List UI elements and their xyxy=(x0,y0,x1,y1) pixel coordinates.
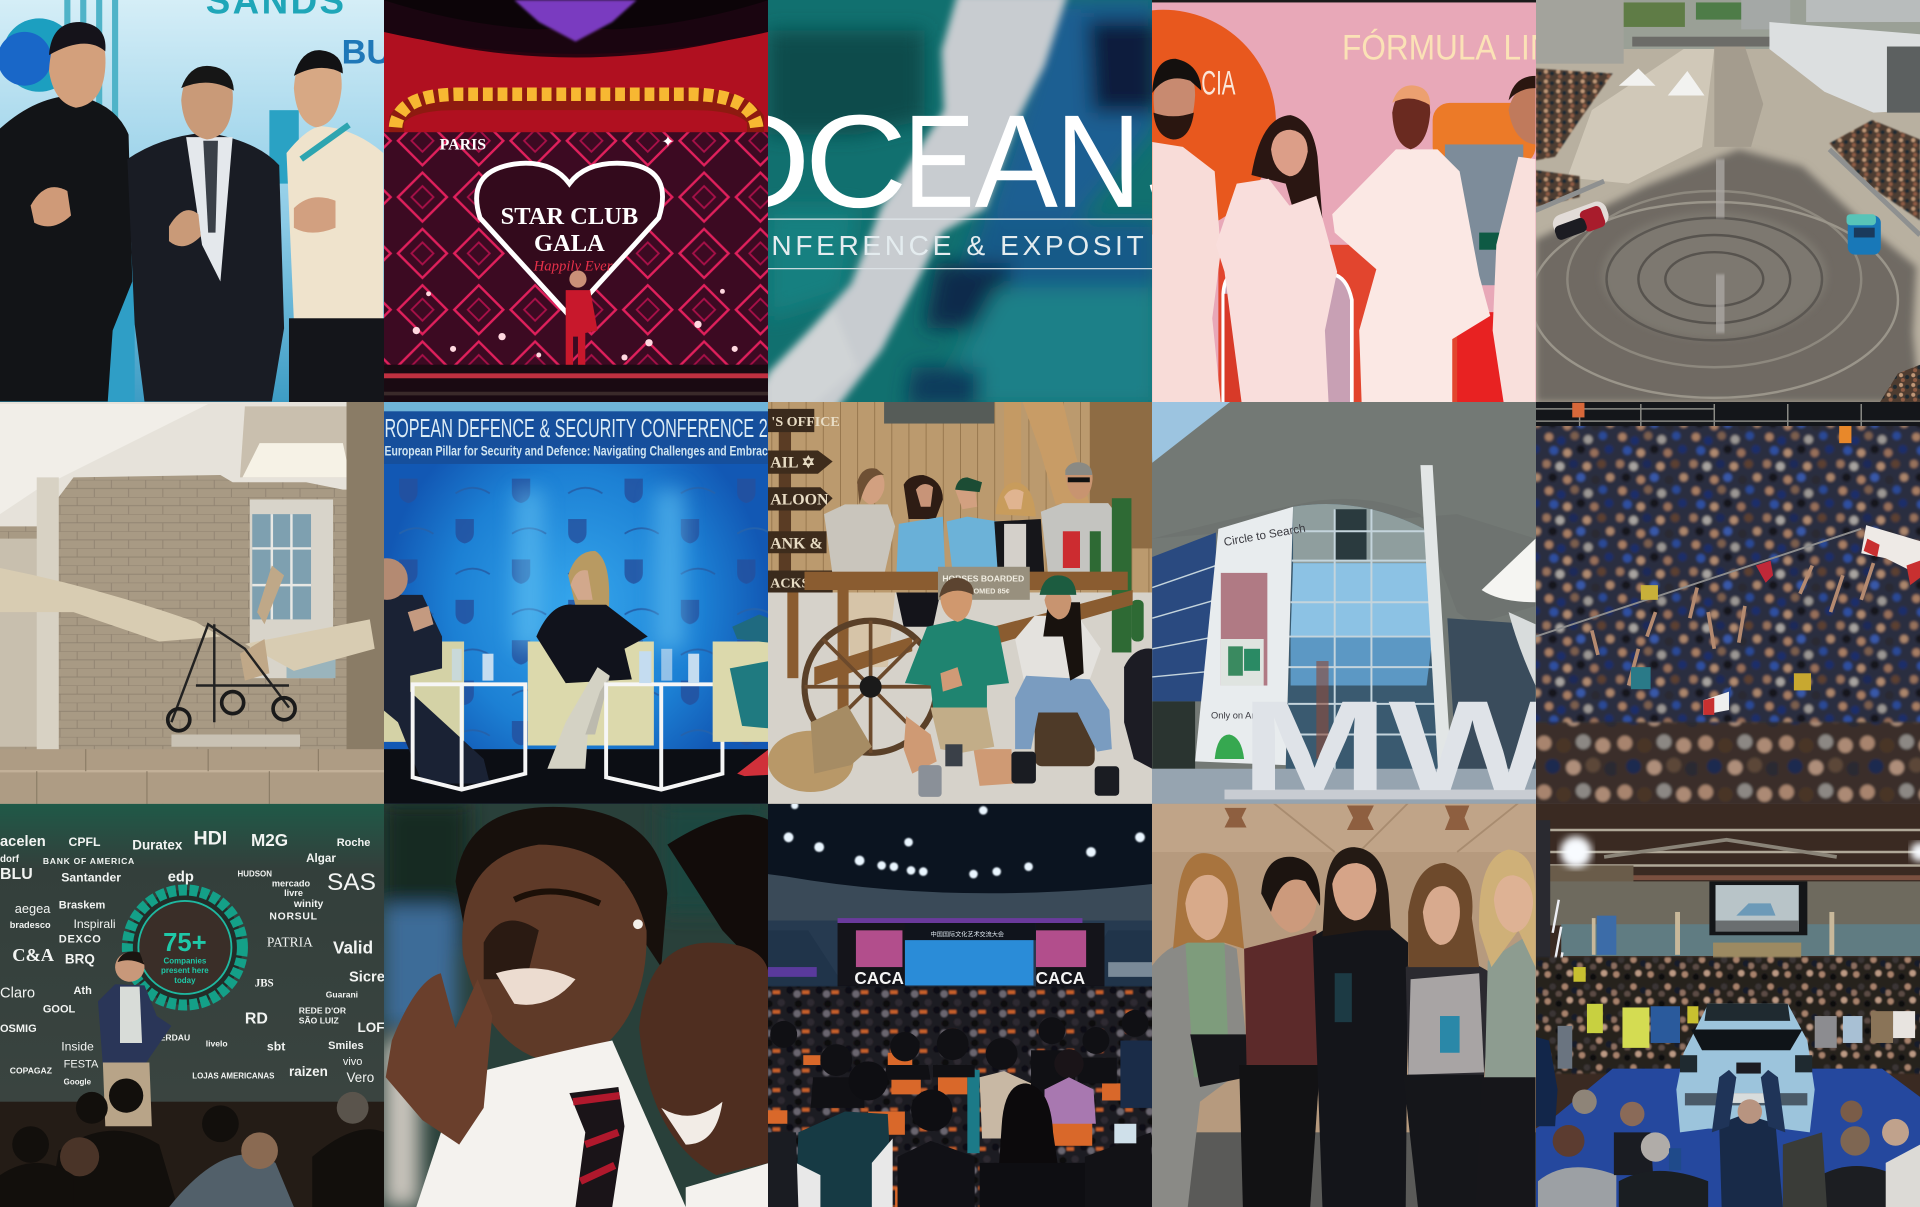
photo: western themed team at wooden barn xyxy=(768,402,1153,804)
side table right xyxy=(606,684,722,790)
wall of company logos: NORSUL xyxy=(269,911,318,922)
left girl white shirt xyxy=(416,1041,686,1207)
wall of company logos: M2G xyxy=(251,830,288,850)
blue suv xyxy=(1676,1004,1815,1132)
photo: museum replica aircraft xyxy=(0,402,384,804)
wall of company logos: Smiles xyxy=(328,1040,364,1052)
photo: laughing students in school uniform xyxy=(383,803,769,1207)
photo: star club gala stage: ✦ xyxy=(661,134,675,151)
woman with patterned top xyxy=(1403,863,1491,1207)
wall of company logos: Claro xyxy=(0,986,35,1002)
photo: drift car street circuit xyxy=(1531,0,1920,403)
stage floor xyxy=(383,749,769,804)
wall of company logos: Inside xyxy=(61,1039,94,1053)
horses boarded sign xyxy=(938,567,1030,600)
wall of company logos: BLU xyxy=(0,866,33,883)
raised arms highlights xyxy=(1592,563,1873,686)
barrier xyxy=(1536,149,1920,235)
woman in blue tee with curly hair xyxy=(896,475,945,627)
right girl xyxy=(639,815,769,1207)
75+ green ring: today xyxy=(174,976,196,985)
red lantern xyxy=(1063,531,1080,568)
wall of company logos: dorf xyxy=(0,854,20,865)
wall of company logos: OSMIG xyxy=(0,1023,37,1035)
woman in black with pale boots xyxy=(536,551,648,769)
crouching woman in white with cap xyxy=(1011,575,1119,796)
photo: formula line promoters in white: CIA xyxy=(1201,64,1236,102)
audience background xyxy=(0,1102,384,1207)
OCEANS title xyxy=(700,88,1216,236)
wall of company logos: GOOL xyxy=(43,1003,76,1015)
gala title xyxy=(501,203,638,275)
wall of company logos: PATRIA xyxy=(267,934,313,949)
crouching man in green shirt xyxy=(904,578,1014,797)
wall of company logos: Ath xyxy=(73,985,92,997)
sandy paddock area xyxy=(1567,49,1714,184)
MW sculpture letters: MW xyxy=(1240,675,1557,818)
orange chairs xyxy=(768,1053,1129,1207)
conference subtitle: NFERENCE & EXPOSIT xyxy=(771,230,1144,261)
arena ceiling lights xyxy=(784,802,1145,878)
woman in blue tee with green cap xyxy=(947,477,998,573)
mid-row attendees xyxy=(770,1010,1153,1108)
man in cream polo with lanyard xyxy=(287,50,384,404)
photo: mwc venue glass building xyxy=(1151,402,1557,818)
aircraft replica xyxy=(0,566,375,731)
photo: five women posing against tan wall xyxy=(1151,803,1537,1207)
wall of company logos: JBS xyxy=(255,978,274,990)
tan sign xyxy=(1713,943,1801,967)
wall of company logos: HUDSON xyxy=(238,869,272,878)
wall of company logos: Guarani xyxy=(326,990,358,1000)
directional signs: ACKSM xyxy=(770,576,823,592)
wall of company logos: Sicre xyxy=(349,970,385,986)
factory crowd xyxy=(1536,957,1920,1074)
gala title: Happily Ever xyxy=(533,259,613,275)
wall pattern xyxy=(1151,803,1537,852)
man with beard xyxy=(1152,59,1221,403)
stadium railing xyxy=(1536,402,1920,443)
buildings xyxy=(1536,0,1920,113)
sky xyxy=(1151,402,1231,463)
gala title: STAR CLUB xyxy=(501,203,638,230)
right grandstand xyxy=(1829,120,1920,220)
circle to search poster: Circle to Search xyxy=(1223,522,1306,549)
photo: star club gala stage xyxy=(383,0,769,403)
wall of company logos xyxy=(0,828,393,1087)
wall of company logos: HDI xyxy=(193,828,227,850)
seated crowd xyxy=(768,987,1153,1207)
lower stone wall xyxy=(0,749,384,804)
high-vis and jackets in crowd xyxy=(1558,967,1915,1069)
backdrop stripes and logo xyxy=(0,0,299,403)
raised hand xyxy=(386,973,492,1145)
ceiling xyxy=(0,402,384,757)
wall of company logos: sbt xyxy=(267,1039,285,1053)
ground xyxy=(1151,769,1537,804)
confetti lights xyxy=(413,289,738,361)
sculpture base xyxy=(1224,790,1537,799)
photo: business delegates giving thumbs up: BU xyxy=(342,34,391,72)
directional signs: ANK & xyxy=(770,535,823,552)
wall of company logos: Valid xyxy=(333,938,373,958)
wall of company logos: Inspirali xyxy=(73,917,116,931)
left panelist xyxy=(366,558,490,783)
asphalt track xyxy=(1531,149,1920,403)
orange panel and display screen xyxy=(1433,103,1536,403)
man at right edge xyxy=(1493,76,1536,403)
performer on stage xyxy=(566,271,598,370)
display plinth xyxy=(171,734,300,747)
wall of company logos: Duratex xyxy=(132,838,183,853)
left pilaster xyxy=(0,539,49,747)
stage video walls: CACA xyxy=(1036,968,1085,988)
corner spectators xyxy=(1880,365,1920,403)
central sofa xyxy=(528,641,654,746)
foreground photographer xyxy=(1712,1063,1785,1207)
spot lights xyxy=(1560,836,1920,868)
woman with peach hair xyxy=(1332,85,1490,403)
wall of company logos: RD xyxy=(245,1010,268,1027)
fan banner xyxy=(1861,525,1920,585)
tricolour flags xyxy=(1703,561,1773,715)
wicker basket xyxy=(768,731,853,792)
blue drift car xyxy=(1847,214,1881,255)
wall of company logos: Roche xyxy=(337,837,370,849)
75+ green ring: 75+ xyxy=(163,929,207,957)
stage video walls: CACA xyxy=(854,968,904,988)
wall of company logos: LOJAS AMERICANAS xyxy=(192,1071,274,1080)
wall of company logos: GERDAU xyxy=(153,1033,190,1043)
marquee arch lights xyxy=(389,88,764,135)
foreground audience xyxy=(1538,1089,1920,1207)
wall of company logos: REDE D'OR xyxy=(299,1006,347,1016)
hanging screen xyxy=(1709,881,1807,935)
bright jackets xyxy=(1631,585,1811,690)
OCEANS title: A xyxy=(975,88,1058,236)
wall of company logos: Algar xyxy=(306,852,336,865)
diagonal rail xyxy=(1536,529,1861,637)
water bottles and glasses xyxy=(452,649,699,683)
white canopy sliver right xyxy=(1482,539,1536,602)
stage video walls xyxy=(838,918,1104,988)
pink diamond LED wall xyxy=(383,132,769,365)
woman in grey tee xyxy=(824,468,895,667)
wall of company logos: Vero xyxy=(347,1070,374,1085)
photo: formula line promoters in white xyxy=(1051,0,1553,403)
directional signs xyxy=(768,409,840,592)
OCEANS title: E xyxy=(904,88,975,236)
wall of company logos: acelen xyxy=(0,834,46,850)
pale sandy floor xyxy=(768,592,1153,804)
horses boarded sign: HORSES BOARDED xyxy=(942,573,1024,583)
OCEANS title: N xyxy=(1056,88,1141,236)
wall of company logos: bradesco xyxy=(10,920,51,930)
backdrop crest pattern xyxy=(383,471,769,753)
window xyxy=(250,499,336,678)
factory wall xyxy=(1536,881,1920,956)
upper stand crowd xyxy=(1518,402,1920,730)
wall of company logos: mercado xyxy=(272,878,310,888)
wall of company logos: DEXCO xyxy=(59,934,102,946)
wall of company logos: COPAGAZ xyxy=(10,1066,52,1076)
wall of company logos: raizen xyxy=(289,1064,328,1079)
red curtain xyxy=(383,29,769,135)
right lower glass xyxy=(1447,618,1536,783)
photo: electric suv launch with crowd xyxy=(1536,803,1920,1207)
heart outline xyxy=(477,163,663,316)
wall of company logos: SAS xyxy=(327,869,376,896)
woman in sage sweater xyxy=(1476,850,1536,1207)
paddock tents xyxy=(1536,69,1704,98)
red and white drift car xyxy=(1550,199,1611,241)
glass facade xyxy=(1152,504,1440,771)
stage video walls: 中国国际文化艺术交流大会 xyxy=(931,930,1004,938)
wall of company logos: LOFT xyxy=(358,1020,393,1035)
central road xyxy=(1714,47,1763,147)
right sofa xyxy=(713,641,769,742)
blonde woman in black blazer xyxy=(994,482,1044,575)
seated person at right edge xyxy=(1124,649,1152,769)
speaker with microphone xyxy=(98,952,171,1126)
wall of company logos: BRQ xyxy=(65,951,95,966)
teal aisle xyxy=(967,1070,980,1153)
man in dark suit xyxy=(127,66,284,402)
wall of company logos: livre xyxy=(284,888,303,898)
man in grey tee with sunglasses xyxy=(1041,462,1117,573)
wooden fence and cart rails xyxy=(787,572,1133,710)
floor xyxy=(1151,1132,1537,1207)
left grandstand xyxy=(1536,69,1613,207)
wall of company logos: FESTA xyxy=(64,1058,99,1070)
circle to search poster xyxy=(1195,507,1306,765)
barn windows and timber xyxy=(884,402,1153,548)
audience silhouettes xyxy=(0,1078,384,1207)
side table left xyxy=(413,684,525,790)
photo: speaker before wall of company logos xyxy=(0,803,393,1207)
75+ green ring xyxy=(127,890,242,1005)
conference banner xyxy=(383,402,769,464)
wall of company logos: Google xyxy=(64,1078,92,1087)
photo: business delegates giving thumbs up xyxy=(0,0,391,404)
woman in grey cardigan xyxy=(1151,853,1249,1207)
woman with long dark hair xyxy=(1216,115,1337,403)
wall of company logos: vivo xyxy=(343,1056,362,1068)
burlap sack xyxy=(811,705,872,774)
leaflet xyxy=(1114,1124,1136,1143)
woman in black with glasses xyxy=(1313,847,1408,1207)
75+ green ring: Companies xyxy=(163,956,207,965)
red plinth with arch xyxy=(1218,245,1457,403)
circle to search poster: Only on Ar xyxy=(1211,711,1254,721)
concrete soffit shading xyxy=(1152,402,1536,624)
wagon wheel xyxy=(804,621,937,753)
gala title: GALA xyxy=(534,230,605,257)
lower rows of larger heads xyxy=(1518,722,1920,820)
earring xyxy=(633,919,643,929)
wall of company logos: Braskem xyxy=(59,899,105,911)
wall of company logos: livelo xyxy=(206,1039,228,1049)
arena seating ring xyxy=(768,874,1153,987)
green cactus prop xyxy=(1090,498,1144,652)
wall of company logos: BANK OF AMERICA xyxy=(43,856,135,866)
scaffold tower xyxy=(1536,820,1550,979)
blurred background xyxy=(383,803,769,1207)
wall of company logos: Santander xyxy=(61,870,121,884)
bright backdrop light columns xyxy=(514,490,684,649)
left sofa xyxy=(383,641,464,742)
white column xyxy=(1420,465,1452,783)
stage floor xyxy=(383,365,769,403)
hanging purple lights xyxy=(514,0,637,42)
man in black polo xyxy=(0,22,132,402)
horses boarded sign: GROOMED 85¢ xyxy=(957,587,1010,596)
wall of company logos: winity xyxy=(293,899,324,910)
75+ green ring: present here xyxy=(161,966,209,975)
wall of company logos: SÃO LUIZ xyxy=(299,1015,339,1025)
ocean foam and deep water xyxy=(768,0,1157,406)
directional signs: 'S OFFICE xyxy=(771,414,840,430)
wall of company logos: aegea xyxy=(15,901,51,916)
photo: ocean conference aerial sea xyxy=(700,0,1216,410)
OCEANS title: O xyxy=(700,88,811,236)
left girl face and hair xyxy=(456,807,667,1065)
photo: packed stadium crowd xyxy=(1518,402,1920,820)
photo: arena conference audience xyxy=(768,802,1153,1207)
directional signs: AIL ✡ xyxy=(770,455,815,472)
left standing man xyxy=(1536,1037,1558,1126)
OCEANS title: C xyxy=(804,88,907,236)
foreground attendees xyxy=(768,1038,1153,1207)
wall of company logos: CPFL xyxy=(69,835,101,849)
photo: european defence and security panel xyxy=(366,402,769,804)
LED light strips xyxy=(1553,900,1562,1011)
gala logos: PARIS xyxy=(440,136,486,153)
red and black striped tie xyxy=(569,1087,624,1207)
wall of company logos: C&A xyxy=(12,945,55,965)
factory roof trusses xyxy=(1536,830,1920,902)
orange circular wall graphic xyxy=(1051,10,1276,235)
woman in puffer vest xyxy=(1239,857,1320,1207)
directional signs: ALOON xyxy=(770,491,829,508)
wall of company logos: edp xyxy=(168,869,194,885)
divider line xyxy=(768,218,1153,220)
right panelist xyxy=(730,615,769,776)
blue stage xyxy=(1536,1069,1920,1207)
